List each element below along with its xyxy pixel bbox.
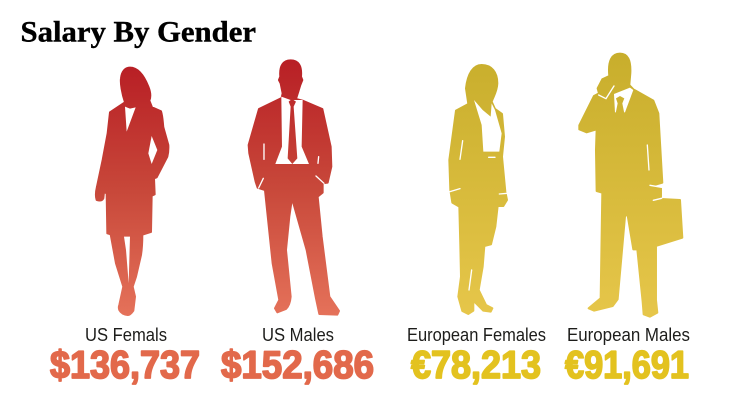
value: US female salary: $136,737: [50, 344, 200, 387]
figure: European female silhouette: [449, 65, 507, 314]
figure: US female silhouette: [96, 68, 168, 315]
seams: [599, 86, 662, 200]
label: European Males: European Males: [567, 325, 690, 345]
value: European female salary: €78,213: [411, 344, 541, 387]
value: European male salary: €91,691: [565, 344, 689, 387]
tie: [288, 99, 297, 164]
pockets: [259, 144, 324, 188]
figure: US male silhouette: [249, 60, 339, 315]
arm gap: [148, 136, 157, 164]
shirt: [474, 100, 502, 152]
collar: [614, 88, 633, 112]
title: Salary By Gender: [20, 16, 256, 48]
figure: European male silhouette with phone and briefcase: [579, 54, 682, 317]
tie: [616, 96, 624, 113]
label: European Females: European Females: [407, 325, 546, 345]
leg gap: [124, 237, 130, 283]
shirt: [125, 107, 136, 132]
label: US Males: US Males: [262, 325, 334, 345]
seams: [450, 141, 507, 290]
value: US male salary: $152,686: [221, 344, 374, 387]
shirt: [275, 97, 309, 164]
label: US Femals: US Femals: [85, 325, 167, 345]
